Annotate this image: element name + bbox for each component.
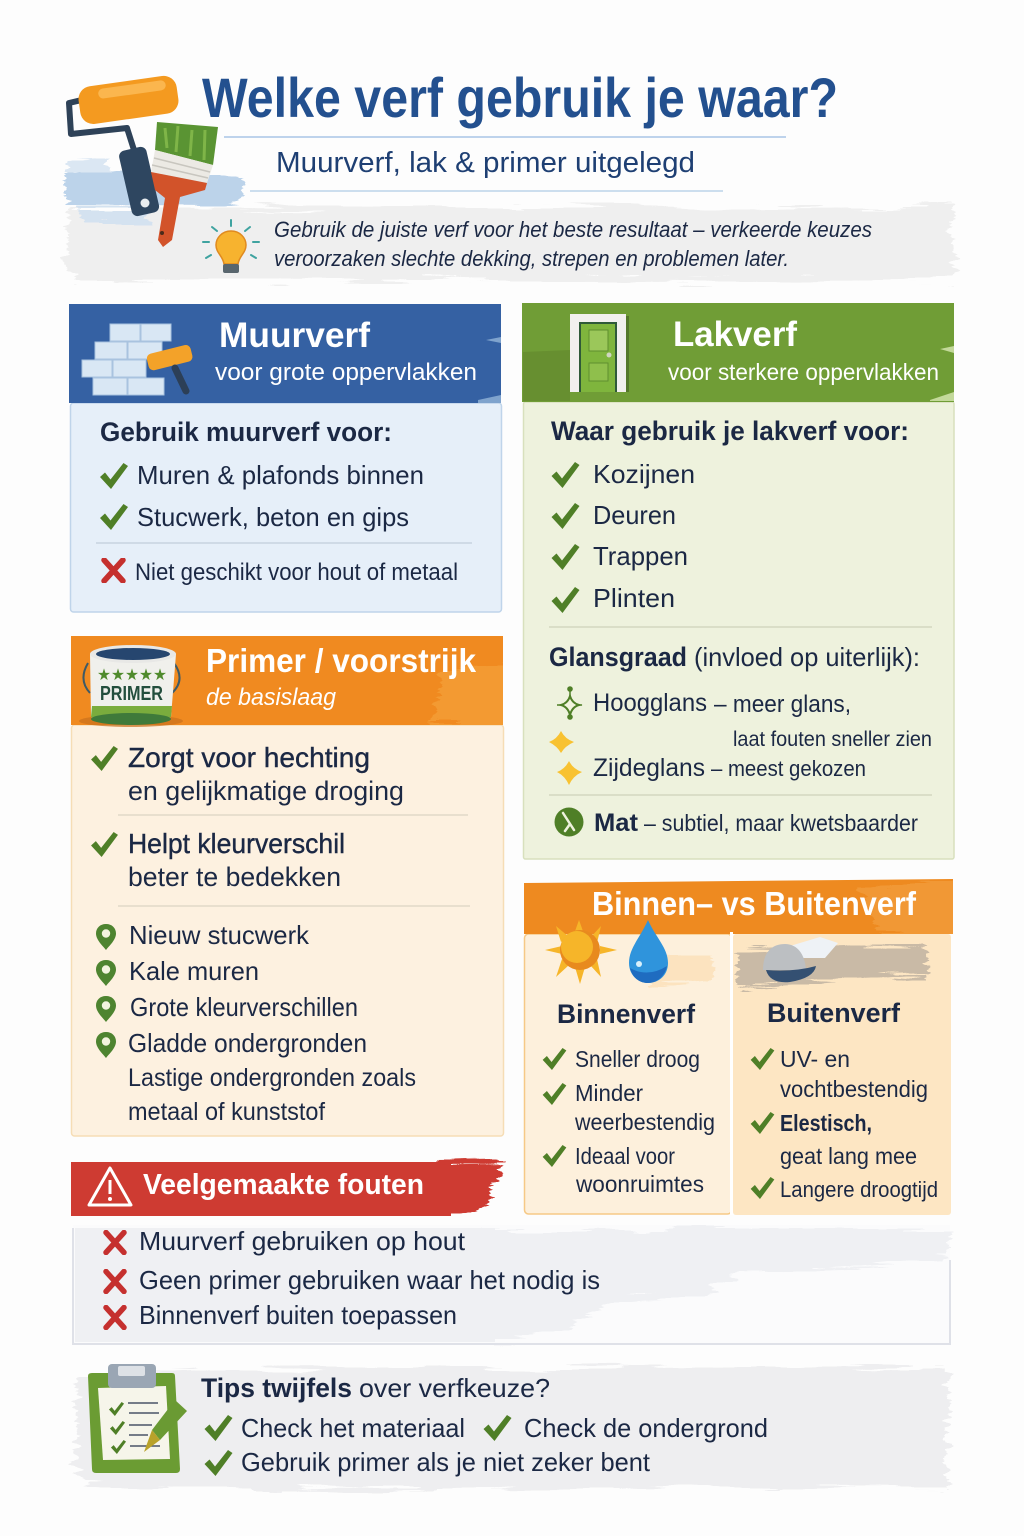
fouten list: Geen primer gebruiken waar het nodig is [139, 1265, 600, 1295]
Binnenverf list [543, 1046, 715, 1197]
Binnenverf list: weerbestendig [574, 1109, 715, 1135]
Glansgraad list: – meest gekozen [711, 756, 866, 781]
Lakverf list: Kozijnen [593, 459, 695, 489]
Primer benefit 1: Zorgt voor hechting [128, 742, 370, 773]
panel: Muurverf: voor grote oppervlakken [215, 359, 477, 386]
Buitenverf list: Elestisch, [780, 1110, 872, 1136]
Lakverf list [552, 459, 695, 613]
Tips heading: Tips twijfels [201, 1373, 352, 1403]
panel: Muurverf: Gebruik muurverf voor: [100, 417, 392, 447]
fouten list: Muurverf gebruiken op hout [139, 1226, 466, 1256]
Glansgraad list: – meer glans, [714, 691, 851, 718]
panel: Binnen vs Buitenverf: Buitenverf [767, 998, 901, 1028]
panel: Muurverf: Muurverf [219, 316, 370, 355]
Tips list: Check het materiaal [241, 1413, 465, 1443]
Lakverf list: Trappen [593, 541, 688, 571]
intro text [274, 217, 872, 271]
Glansgraad list: Zijdeglans [593, 754, 705, 782]
panel: Lakverf: voor sterkere oppervlakken [668, 359, 939, 385]
fouten header band [71, 1161, 504, 1216]
icon: sun [545, 920, 617, 984]
Muurverf header band [69, 304, 501, 403]
Binnenverf list: Sneller droog [575, 1046, 700, 1072]
Muurverf list: Stucwerk, beton en gips [137, 502, 409, 532]
panel: Tips [75, 1364, 948, 1489]
Buitenverf list: UV- en [780, 1046, 850, 1072]
icon: water drop [629, 920, 668, 983]
icon: bricks and roller [82, 324, 194, 395]
icon: high gloss sparkle [557, 686, 582, 720]
Muurverf list: Muren & plafonds binnen [137, 460, 424, 490]
fouten body [73, 1225, 950, 1345]
Glansgraad heading: Glansgraad [549, 642, 687, 672]
Glansgraad list: – subtiel, maar kwetsbaarder [644, 810, 918, 836]
Primer header band [71, 636, 503, 725]
icon: warning triangle [89, 1168, 131, 1205]
fouten list [106, 1226, 600, 1330]
panel: Primer: Primer / voorstrijk [206, 642, 477, 679]
brush: outdoor backdrop [738, 944, 928, 988]
Binnenverf list: Ideaal voor [575, 1143, 675, 1169]
icon: clipboard [88, 1364, 187, 1473]
Primer surfaces list: Grote kleurverschillen [130, 992, 358, 1022]
Tips heading: over verfkeuze? [359, 1373, 550, 1403]
panel: Binnen vs Buitenverf: Binnenverf [557, 999, 696, 1029]
icon: cap [763, 937, 838, 982]
Primer benefit 1: en gelijkmatige droging [128, 776, 404, 806]
Glansgraad heading: (invloed op uiterlijk): [694, 642, 920, 672]
panel: Lakverf: Waar gebruik je lakverf voor: [551, 416, 909, 446]
Lakverf list: Deuren [593, 500, 676, 530]
panel: Binnen vs Buitenverf [524, 879, 960, 1215]
panel: Veelgemaakte fouten [71, 1161, 950, 1345]
Primer benefit 2: beter te bedekken [128, 862, 341, 892]
Glansgraad list: Mat [594, 809, 639, 837]
Muurverf warning: Niet geschikt voor hout of metaal [135, 559, 458, 586]
panel: Veelgemaakte fouten: Veelgemaakte fouten [143, 1169, 424, 1201]
subtitle: Muurverf, lak & primer uitgelegd [276, 147, 695, 179]
icon: paint roller [69, 74, 180, 217]
Glansgraad list [549, 686, 932, 837]
Primer surfaces list [96, 920, 416, 1126]
Binnenverf list: Minder [575, 1080, 643, 1106]
title: Welke verf gebruik je waar? [202, 66, 838, 129]
fouten list: Binnenverf buiten toepassen [139, 1300, 457, 1330]
icon: yellow sparkles [549, 731, 582, 785]
icon: primer can [79, 645, 183, 727]
header brush background [65, 158, 955, 281]
Tips list: Check de ondergrond [524, 1413, 768, 1443]
Glansgraad list: Hoogglans [593, 689, 707, 717]
panel: Muurverf [69, 304, 502, 612]
icon: primer can: PRIMER [100, 683, 163, 705]
Lakverf header band [522, 303, 954, 402]
Primer benefit 2 [91, 828, 345, 892]
Tips list [204, 1413, 768, 1477]
Primer surfaces list: Gladde ondergronden [128, 1028, 367, 1058]
panel: Binnen vs Buitenverf: Binnen– vs Buitenverf [592, 885, 917, 922]
Tips heading [201, 1373, 550, 1403]
icon: primer can: ★★★★★ [97, 667, 167, 684]
intro text: Gebruik de juiste verf voor het beste resultaat – verkeerde keuzes [274, 217, 872, 242]
Binnen vs Buitenverf header band [524, 879, 953, 934]
Primer surfaces list: Nieuw stucwerk [129, 920, 310, 950]
Primer surfaces list: Kale muren [129, 956, 259, 986]
Tips list: Gebruik primer als je niet zeker bent [241, 1447, 651, 1477]
icon: green door [570, 314, 629, 392]
Lakverf list: Plinten [593, 583, 675, 613]
icon: paint brush [151, 122, 218, 247]
Buitenverf list: geat lang mee [780, 1143, 917, 1169]
panel: Primer [71, 636, 510, 1136]
Primer surfaces list: Lastige ondergronden zoals [128, 1064, 416, 1092]
Binnenverf list: woonruimtes [575, 1171, 704, 1197]
panel: Lakverf [522, 303, 954, 859]
Primer surfaces list: metaal of kunststof [128, 1098, 325, 1126]
Glansgraad heading [549, 642, 920, 672]
panel: Lakverf: Lakverf [673, 315, 797, 354]
Glansgraad list: laat fouten sneller zien [733, 728, 932, 751]
Muurverf list [100, 460, 424, 532]
Primer benefit 1 [91, 742, 404, 806]
icon: light bulb [203, 220, 259, 273]
Buitenverf list [751, 1046, 938, 1202]
Buitenverf list: vochtbestendig [780, 1076, 928, 1102]
intro text: veroorzaken slechte dekking, strepen en problemen later. [274, 246, 789, 271]
Primer benefit 2: Helpt kleurverschil [128, 828, 345, 859]
Buitenverf list: Langere droogtijd [780, 1177, 938, 1202]
panel: Primer: de basislaag [206, 684, 337, 711]
icon: matte circle [554, 808, 584, 836]
